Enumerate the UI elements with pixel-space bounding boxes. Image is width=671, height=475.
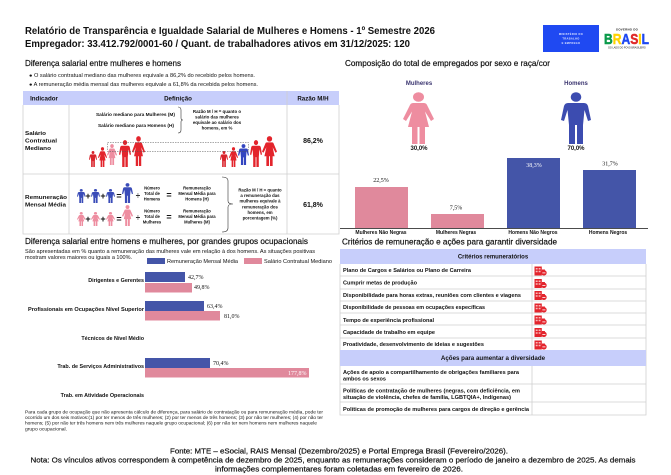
footnote: homens; (5) por não ter três homens nem três mulheres naquele grupo ocupacional; (6) por não ter nem homens nem mulheres naquele <box>25 421 317 426</box>
panel: diferença salarial entre mulheres e homens <box>23 58 339 234</box>
row: remuneração mensal média: + <box>85 214 91 224</box>
heading: grupos ocupacionais: Diferença salarial entre homens e mulheres, por grandes grupos ocupacionais <box>25 236 308 246</box>
bar chart: grupos ocupacionais <box>28 272 309 399</box>
bar chart: grupos ocupacionais: Trab. em Atividade Operacionais <box>61 393 144 399</box>
row: salário contratual mediano: 86,2% <box>303 138 324 145</box>
list: critérios: Disponibilidade de pessoas em ocupações específicas <box>343 305 485 311</box>
bar chart: raça/cor <box>340 158 648 236</box>
list: critérios: Disponibilidade para horas extras, reuniões com clientes e viagens <box>343 293 521 299</box>
logo: governo do Brasil: GOVERNO DO <box>616 28 639 32</box>
row: remuneração mensal média: Mulheres <box>143 220 162 224</box>
footnote: Para cada grupo de ocupação que não apresenta cálculo de diferença, para salário de contratação ou para remuneração média, pode ter <box>25 410 323 414</box>
list: ações: ambos os sexos <box>343 376 386 382</box>
bar chart: grupos ocupacionais: 81,0% <box>224 314 240 320</box>
row: salário contratual mediano: Salário <box>25 131 47 137</box>
list: critérios: Proatividade, desenvolvimento de ideias e sugestões <box>343 342 484 348</box>
bar chart: raça/cor: 31,7% <box>602 162 618 168</box>
row: remuneração mensal média: Total de <box>144 191 161 196</box>
pictogram: mulheres: Mulheres <box>406 81 433 87</box>
row: remuneração mensal média: + <box>85 191 91 201</box>
list: critérios: Capacidade de trabalho em equipe <box>343 330 435 336</box>
pictogram: homens <box>561 81 591 152</box>
bullets <box>29 73 258 88</box>
legend: Remuneração Mensal Média <box>167 259 238 265</box>
header: ações para aumentar a diversidade: Ações para aumentar a diversidade <box>441 355 546 362</box>
list: critérios <box>343 268 521 348</box>
row: remuneração mensal média: Número <box>144 208 160 214</box>
row: remuneração mensal média: Mensal Média <box>25 202 67 208</box>
row: salário contratual mediano: Contratual <box>25 138 58 144</box>
row: remuneração mensal média: = <box>116 191 122 201</box>
row: remuneração mensal média: + <box>100 191 106 201</box>
row: salário contratual mediano: Razão M / H = quanto o <box>193 109 241 114</box>
logo: ministério: TRABALHO <box>562 36 580 40</box>
list: ações: Políticas de promoção de mulheres para cargos de direção e gerência <box>343 407 529 413</box>
legend <box>147 258 332 265</box>
bar chart: grupos ocupacionais: 42,7% <box>188 275 204 281</box>
bar chart: grupos ocupacionais: Trab. de Serviços Administrativos <box>57 364 144 370</box>
header: critérios remuneratórios: Critérios remuneratórios <box>458 254 529 260</box>
row: remuneração mensal média: ÷ <box>136 213 141 222</box>
title: Empregador: 33.412.792/0001-60 / Quant. de trabalhadores ativos em 31/12/2025: 120 <box>25 38 410 50</box>
logo: ministério <box>543 25 599 52</box>
table header: Definição <box>164 96 192 102</box>
list: critérios: Tempo de experiência profissional <box>343 318 435 324</box>
row: salário contratual mediano: Mediano <box>25 146 52 152</box>
row: remuneração mensal média <box>25 177 324 232</box>
bar chart: raça/cor: 22,5% <box>373 178 389 184</box>
row: remuneração mensal média: remuneração dos <box>242 204 279 209</box>
row: remuneração mensal média: Mensal Média para <box>178 191 216 196</box>
list: ações: situação de violência, chefes de família, LGBTQIA+, Indígenas) <box>343 395 511 401</box>
source note: Nota: Os vínculos ativos correspondem à competência de dezembro de 2025, enquanto as remunerações consideram o período de janeiro a dezembro de 2025. As demais <box>30 456 636 464</box>
header: ações para aumentar a diversidade <box>340 350 646 366</box>
list: ações: Políticas de contratação de mulheres (negras, com deficiência, em <box>343 388 521 394</box>
bar chart: grupos ocupacionais: 70,4% <box>213 361 228 367</box>
bullets: ● O salário contratual mediano das mulheres equivale a 86,2% do recebido pelos homens. <box>29 73 255 79</box>
heading: critérios: Critérios de remuneração e ações para garantir diversidade <box>342 236 557 246</box>
subtitle: mostram valores maiores ou iguais a 100%. <box>25 255 132 261</box>
bullets: ● A remuneração média mensal das mulheres equivale a 61,8% da recebida pelos homens. <box>29 82 258 88</box>
logo: governo do Brasil: DO LADO DO POVO BRASILEIRO <box>608 46 646 50</box>
row: salário contratual mediano: Salário mediano para Mulheres (M) <box>96 112 176 117</box>
source note: informações complementares foram coletadas em fevereiro de 2026. <box>215 464 463 474</box>
footnote: grupo ocupacional. <box>25 426 67 431</box>
row: remuneração mensal média: ÷ <box>136 191 141 200</box>
logo: ministério: MINISTÉRIO DO <box>559 31 583 36</box>
row: remuneração mensal média: Número <box>144 186 160 190</box>
row: salário contratual mediano <box>25 107 324 167</box>
source note <box>30 446 636 474</box>
row: remuneração mensal média: Homens (H) <box>185 196 209 202</box>
row: remuneração mensal média: mulheres equivale à <box>239 199 281 204</box>
bar chart: raça/cor: Homens Negros <box>589 230 627 236</box>
panel: composição por sexo e raça/cor <box>340 58 648 236</box>
bar chart: grupos ocupacionais: 177,8% <box>288 371 306 377</box>
table header: Indicador <box>30 96 59 102</box>
row: remuneração mensal média: Mulheres (M) <box>184 220 211 224</box>
row: salário contratual mediano: Salário mediano para Homens (H) <box>98 123 175 128</box>
pictogram: homens: Homens <box>564 81 588 87</box>
footnote: ocorrido um dos seis motivos:(1) por ter menos de três mulheres; (2) por ter menos de três homens; (3) por não ter mulheres; (4) por não ter <box>25 415 323 420</box>
bar chart: raça/cor: 38,3% <box>526 163 542 169</box>
title <box>25 25 435 50</box>
row: remuneração mensal média: porcentagem (%) <box>243 216 278 221</box>
icons: critério não adotado <box>534 266 547 350</box>
heading: composição: Composição do total de empregados por sexo e raça/cor <box>345 58 550 68</box>
row: remuneração mensal média: = <box>166 212 172 222</box>
row: remuneração mensal média: 61,8% <box>303 202 324 209</box>
row: remuneração mensal média: + <box>100 214 106 224</box>
row: remuneração mensal média: Razão M / H = quanto <box>238 188 282 192</box>
row: remuneração mensal média: Remuneração <box>183 208 211 214</box>
list: critérios: Cumprir metas de produção <box>343 280 417 286</box>
row: salário contratual mediano: equivale ao salário dos <box>193 120 242 125</box>
bar chart: raça/cor: 7,5% <box>450 206 462 212</box>
row: remuneração mensal média: Total de <box>144 214 161 219</box>
heading: diferença salarial: Diferença salarial entre mulheres e homens <box>25 58 181 68</box>
logo: ministério: E EMPREGO <box>562 41 580 45</box>
row: remuneração mensal média: Remuneração <box>183 186 211 190</box>
row: remuneração mensal média: homens, em <box>247 210 273 215</box>
pictogram: mulheres <box>403 81 434 152</box>
row: salário contratual mediano: homens, em % <box>202 126 232 130</box>
bar chart: raça/cor: Homens Não Negros <box>508 230 558 236</box>
row: remuneração mensal média: a remuneração das <box>240 193 280 198</box>
table header <box>23 91 339 105</box>
bar chart: raça/cor: Mulheres Não Negras <box>355 230 407 236</box>
row: remuneração mensal média: Homens <box>144 196 161 202</box>
bar chart: grupos ocupacionais: Técnicos de Nível Médio <box>81 336 145 342</box>
bar chart: grupos ocupacionais: Profissionais em Ocupações Nível Superior <box>28 307 145 313</box>
legend: Salário Contratual Mediano <box>264 259 332 265</box>
pictogram: mulheres: 30,0% <box>410 146 428 152</box>
bar chart: raça/cor: Mulheres Negras <box>436 230 476 236</box>
footnote <box>25 410 323 431</box>
row: remuneração mensal média: Remuneração <box>25 195 68 201</box>
table header: Razão M/H <box>297 96 329 102</box>
bar chart: grupos ocupacionais: 49,8% <box>194 285 210 291</box>
panel: diferença salarial por grupos ocupacionais <box>25 236 332 431</box>
header: critérios remuneratórios <box>340 249 646 264</box>
row: remuneração mensal média: Mensal Média para <box>178 214 216 219</box>
list: ações <box>343 370 529 413</box>
row: remuneração mensal média: = <box>166 190 172 200</box>
list: critérios: Plano de Cargos e Salários ou Plano de Carreira <box>343 268 471 274</box>
logo: governo do Brasil: BRASIL <box>604 31 649 48</box>
subtitle: São apresentadas em % quanto a remuneração das mulheres vale em relação à dos homens. As situações positivas <box>25 249 316 255</box>
bar chart: grupos ocupacionais: 63,4% <box>207 304 222 310</box>
bar chart: grupos ocupacionais: Dirigentes e Gerentes <box>88 278 144 284</box>
panel: critérios de remuneração e ações <box>340 236 646 415</box>
row: remuneração mensal média: = <box>116 214 122 224</box>
subtitle <box>25 249 316 261</box>
row: salário contratual mediano: salário das mulheres <box>195 114 239 120</box>
pictogram: homens: 70,0% <box>567 146 585 152</box>
source note: Fonte: MTE – eSocial, RAIS Mensal (Dezembro/2025) e Portal Emprega Brasil (Fevereiro/2026). <box>170 446 508 456</box>
title: Relatório de Transparência e Igualdade Salarial de Mulheres e Homens - 1º Semestre 2026 <box>25 25 435 37</box>
list: ações: Ações de apoio a compartilhamento de obrigações familiares para <box>343 370 519 376</box>
